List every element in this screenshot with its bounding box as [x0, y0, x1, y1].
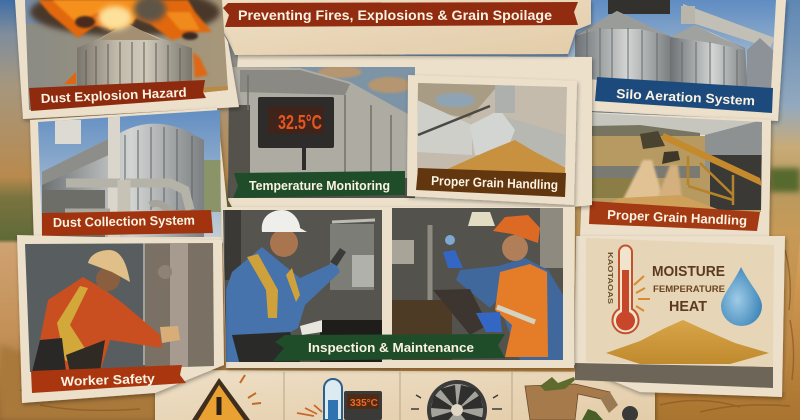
panel: dust explosion hazard	[15, 0, 239, 119]
panel: silo aeration system	[568, 0, 786, 121]
label: silo aeration system	[595, 77, 773, 113]
bottom icon strip	[155, 370, 655, 420]
icon: thermometer	[612, 246, 650, 333]
panel: worker safety	[17, 235, 224, 403]
panel: central frame	[228, 55, 592, 207]
label: dust explosion hazard	[29, 80, 206, 111]
icon: digital temperature display	[258, 97, 334, 170]
label: proper grain handling, center	[416, 168, 566, 197]
title banner	[223, 2, 578, 27]
photo: technician with white helmet	[223, 210, 383, 365]
panel: title paper	[204, 0, 591, 55]
icon: water drop	[721, 267, 762, 326]
vertical caption: KAOTAOAS	[606, 252, 615, 304]
label: proper grain handling, right: Proper Grain Handling	[607, 207, 747, 228]
photo: temperature monitoring	[228, 66, 418, 202]
panel: proper grain handling, right	[580, 112, 771, 240]
label: inspection and maintenance	[273, 334, 505, 361]
label: proper grain handling, center: Proper Grain Handling	[431, 173, 558, 192]
label: worker safety	[31, 365, 186, 393]
icon: warning triangle	[192, 375, 261, 420]
icon: fan	[411, 380, 502, 420]
heading: moisture: MOISTURE	[652, 263, 725, 280]
label: silo aeration system: Silo Aeration System	[616, 86, 755, 108]
panel: dust collection system	[30, 105, 231, 246]
icon: thermometer with display	[297, 379, 382, 420]
label: temperature monitoring	[233, 171, 405, 198]
panel: info card moisture temperature heat	[574, 236, 785, 397]
photo: technician with orange helmet	[392, 208, 564, 363]
label: proper grain handling, right	[589, 201, 760, 231]
panel: proper grain handling, center	[407, 75, 577, 205]
label: inspection and maintenance: Inspection & Maintenance	[308, 340, 474, 355]
panel: inspection and maintenance	[222, 207, 575, 368]
icon: grain sack with herbs	[525, 377, 638, 420]
label: dust collection system	[42, 210, 213, 236]
title banner: Preventing Fires, Explosions & Grain Spoilage	[238, 7, 552, 23]
label: dust explosion hazard: Dust Explosion Hazard	[40, 85, 187, 106]
icon: thermometer with display: 335°C	[350, 398, 378, 409]
heading: temperature: FEMPERATURE	[653, 284, 725, 295]
icon: digital temperature display: 32.5°C	[278, 112, 322, 134]
illustration: grain pile	[606, 320, 769, 364]
label: dust collection system: Dust Collection System	[53, 213, 195, 230]
heading: heat: HEAT	[669, 298, 707, 315]
label: temperature monitoring: Temperature Monitoring	[249, 178, 390, 193]
label: worker safety: Worker Safety	[61, 371, 156, 389]
